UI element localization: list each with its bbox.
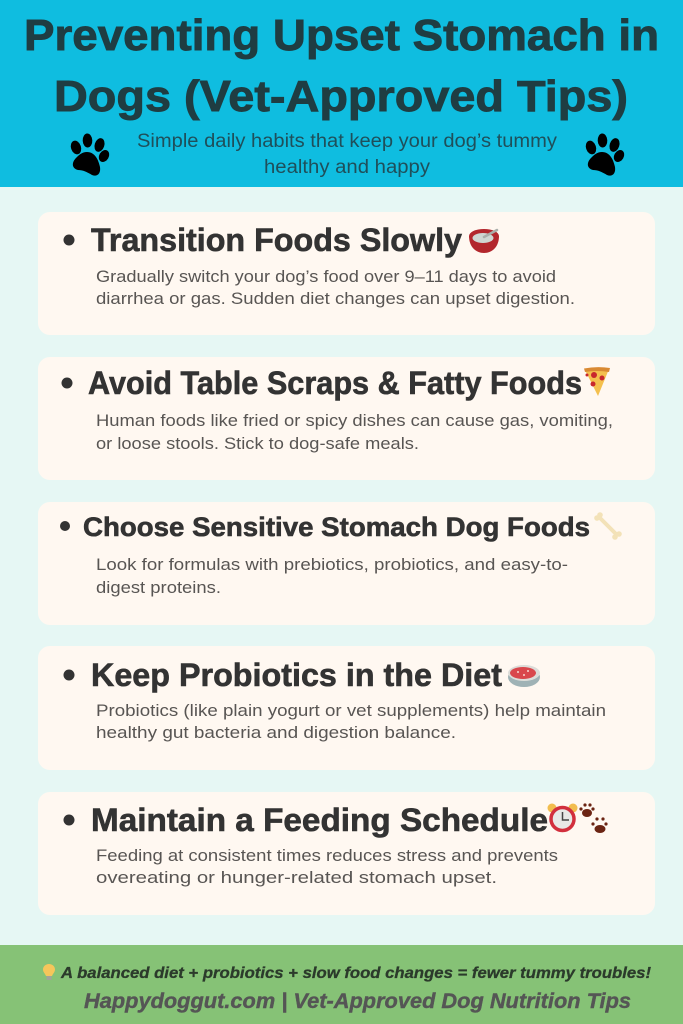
body text: or loose stools. Stick to dog-safe meals. xyxy=(96,434,419,453)
icon: right paw xyxy=(584,133,626,176)
heading: Choose Sensitive Stomach Dog Foods xyxy=(83,512,590,542)
body text: Probiotics (like plain yogurt or vet supplements) help maintain xyxy=(96,701,606,720)
subtitle: healthy and happy xyxy=(264,157,431,178)
title xyxy=(24,11,659,121)
icon: light bulb xyxy=(43,964,55,980)
heading: Maintain a Feeding Schedule xyxy=(91,802,548,838)
body text: Feeding at consistent times reduces stress and prevents xyxy=(96,846,558,865)
body text: Human foods like fried or spicy dishes can cause gas, vomiting, xyxy=(96,411,613,430)
body text: Gradually switch your dog’s food over 9–11 days to avoid xyxy=(96,267,556,286)
panel: probiotics xyxy=(38,646,655,770)
heading: Avoid Table Scraps & Fatty Foods xyxy=(88,365,582,401)
header banner xyxy=(0,0,683,187)
bullet xyxy=(64,234,74,246)
panel: table scraps xyxy=(38,357,655,480)
body text xyxy=(96,701,606,742)
bullet xyxy=(64,814,74,826)
body text: Look for formulas with prebiotics, probiotics, and easy-to- xyxy=(96,555,568,574)
icon: bone xyxy=(594,512,622,540)
body text: healthy gut bacteria and digestion balance. xyxy=(96,723,456,742)
heading: Keep Probiotics in the Diet xyxy=(91,657,502,693)
body text: digest proteins. xyxy=(96,578,221,597)
body text xyxy=(96,411,613,453)
icon: alarm clock xyxy=(548,804,578,830)
bullet xyxy=(60,521,70,531)
title: Preventing Upset Stomach in xyxy=(24,11,659,60)
footer banner xyxy=(0,945,683,1024)
icon: paw prints xyxy=(579,803,608,833)
subtitle xyxy=(137,131,558,178)
icon: food dish xyxy=(508,665,540,687)
subtitle: Simple daily habits that keep your dog’s tummy xyxy=(137,131,558,152)
body text: overeating or hunger-related stomach upset. xyxy=(96,868,497,887)
heading: Transition Foods Slowly xyxy=(91,222,462,258)
panel: sensitive stomach foods xyxy=(38,502,655,625)
icon: left paw xyxy=(69,133,111,176)
body text: diarrhea or gas. Sudden diet changes can upset digestion. xyxy=(96,289,575,308)
title: Dogs (Vet-Approved Tips) xyxy=(54,72,628,121)
panel: transition foods xyxy=(38,212,655,335)
body text xyxy=(96,267,575,308)
body text xyxy=(96,846,558,887)
icon: bowl xyxy=(469,229,499,253)
bullet xyxy=(62,378,72,388)
tagline: A balanced diet + probiotics + slow food changes = fewer tummy troubles! xyxy=(60,965,652,982)
body text xyxy=(96,555,568,597)
panel: feeding schedule xyxy=(38,792,655,915)
website line: Happydoggut.com | Vet-Approved Dog Nutrition Tips xyxy=(84,990,631,1013)
icon: pizza xyxy=(584,367,610,396)
bullet xyxy=(64,670,74,680)
